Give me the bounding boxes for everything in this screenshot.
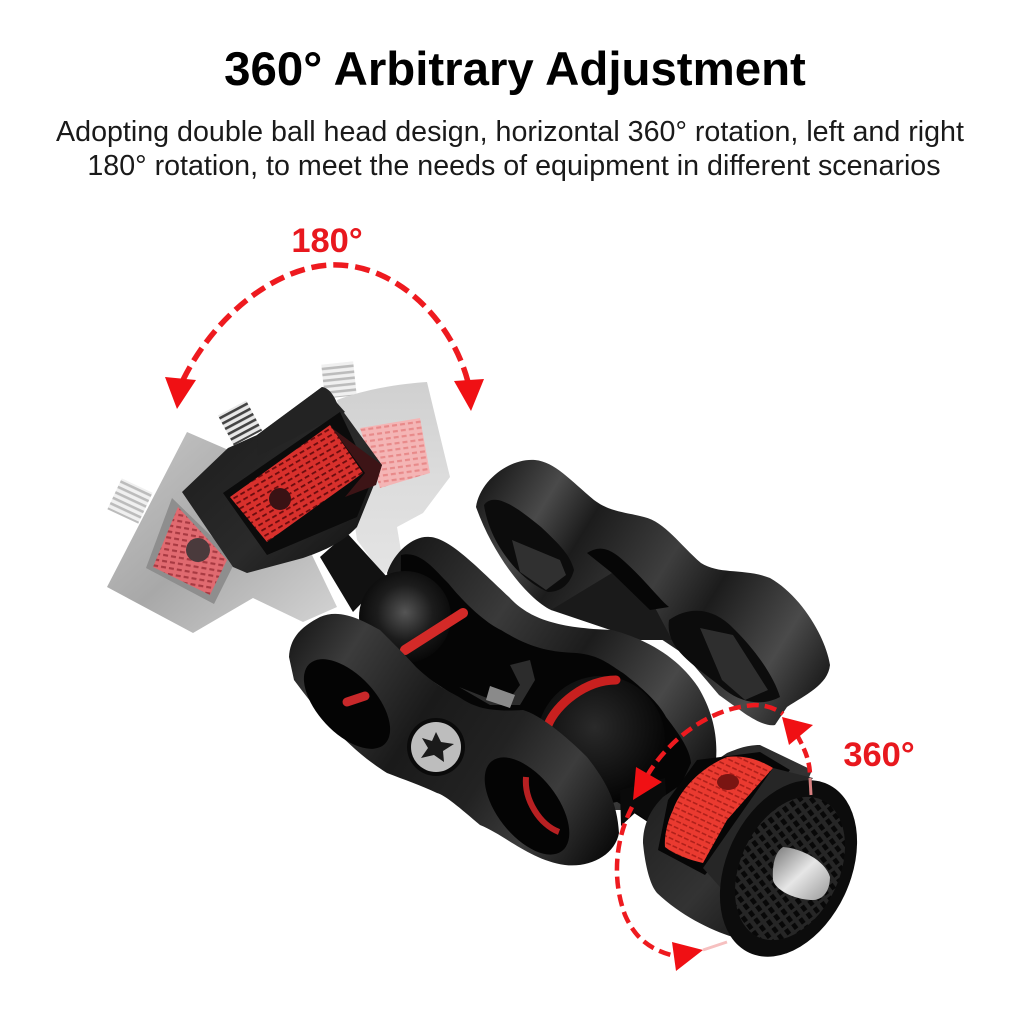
red arc arrow 360 upper — [633, 705, 813, 800]
description text: 180° rotation, to meet the needs of equipment in different scenarios — [87, 150, 941, 182]
rear clamp plate — [387, 537, 716, 830]
description text: Adopting double ball head design, horizontal 360° rotation, left and right — [56, 116, 964, 148]
front clamp plate — [288, 614, 619, 869]
left hole — [288, 644, 406, 764]
red arc arrow 360 lower — [617, 807, 727, 971]
ghost mount left — [107, 432, 337, 633]
tripod screw — [773, 847, 830, 900]
right hole — [468, 743, 586, 869]
main mount with knurled red plate — [182, 387, 387, 612]
far clamp arm — [476, 460, 830, 725]
front ball head mount — [620, 745, 884, 979]
label 360: 360° — [843, 736, 915, 774]
ghost mount right — [321, 361, 450, 575]
red arc arrow 180 — [165, 265, 484, 411]
cross-head screw — [407, 718, 465, 776]
ball joints, red rings and bolt — [359, 571, 665, 804]
label 180: 180° — [291, 222, 363, 260]
disc — [693, 758, 884, 979]
title: 360° Arbitrary Adjustment — [224, 43, 806, 96]
red knurled ring — [665, 757, 773, 863]
description text — [56, 116, 964, 182]
